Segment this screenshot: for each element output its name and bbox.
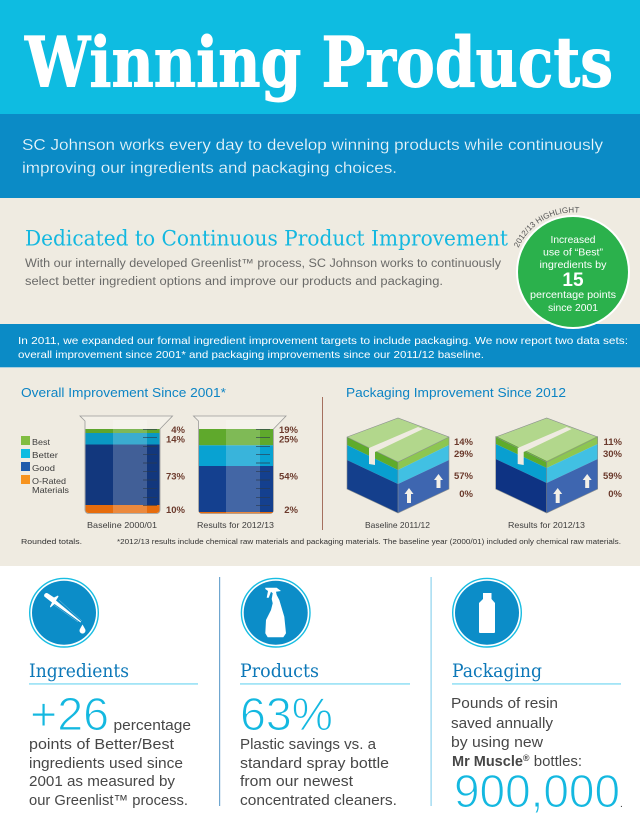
heading: Packaging (452, 660, 542, 682)
beaker chart: baseline 2000/01: 10% (166, 505, 186, 516)
legend: Better (32, 450, 58, 460)
panel: charts (0, 368, 640, 566)
description: concentrated cleaners. (240, 793, 397, 809)
callout: 2012/13 highlight (514, 206, 630, 329)
beaker chart: results 2012/13: 19% (279, 425, 299, 436)
note text: overall improvement since 2001* and packaging improvements since our 2011/12 baseline. (18, 349, 484, 361)
legend: Best (32, 437, 51, 447)
intro text: improving our ingredients and packaging choices. (22, 160, 397, 177)
chart heading: packaging: Packaging Improvement Since 2012 (346, 385, 566, 400)
blue note band (0, 324, 640, 368)
box chart: baseline 2011/12: 14% (454, 437, 474, 448)
heading: Dedicated to Continuous Product Improvement (25, 227, 508, 252)
stat: 900,000 (454, 765, 620, 817)
stat: +26 (30, 688, 109, 740)
box chart: results 2012/13: 11% (603, 437, 623, 448)
panel: ingredients (29, 578, 198, 809)
description: ingredients used since (29, 756, 183, 772)
description: from our newest (240, 774, 353, 790)
footnotes: *2012/13 results include chemical raw materials and packaging materials. The baseline year (2000/01) included only chemical raw materials. (117, 537, 621, 546)
box chart: results 2012/13 (496, 418, 623, 530)
box chart: baseline 2011/12 (347, 418, 474, 530)
intro band (0, 114, 640, 198)
heading: Ingredients (29, 660, 129, 682)
stat: 63% (240, 688, 333, 740)
callout text: ingredients by (540, 259, 607, 271)
box chart: results 2012/13: Results for 2012/13 (508, 520, 585, 530)
box chart: baseline 2011/12: 0% (459, 489, 474, 500)
beaker chart: baseline 2000/01: 73% (166, 472, 186, 482)
icon: bottle (453, 578, 521, 647)
description: With our internally developed Greenlist™ process, SC Johnson works to continuously (25, 258, 501, 270)
beaker chart: results 2012/13: Results for 2012/13 (197, 520, 274, 530)
description: bottles: (530, 753, 582, 770)
legend (21, 436, 69, 495)
legend: Materials (32, 485, 69, 495)
description: Plastic savings vs. a (240, 737, 377, 753)
box chart: results 2012/13: 0% (608, 489, 623, 500)
beaker chart: results 2012/13: 2% (284, 505, 299, 516)
beaker chart: baseline 2000/01: 4% (171, 425, 186, 436)
beaker chart: results 2012/13: 54% (279, 472, 299, 482)
description: our Greenlist™ process. (29, 793, 188, 809)
box chart: results 2012/13: 30% (603, 449, 623, 460)
beaker chart: results 2012/13: 25% (279, 434, 299, 446)
description: ® (523, 753, 530, 763)
panel: packaging (451, 578, 623, 817)
description: by using new (451, 735, 544, 751)
beaker chart: baseline 2000/01 (80, 416, 186, 530)
description: select better ingredient options and improve our products and packaging. (25, 276, 443, 288)
callout text: use of “Best” (543, 246, 604, 258)
callout text: 15 (562, 270, 584, 291)
box chart: baseline 2011/12: 57% (454, 471, 474, 482)
description: Pounds of resin (451, 696, 558, 712)
chart heading: overall: Overall Improvement Since 2001* (21, 385, 226, 400)
note text: In 2011, we expanded our formal ingredient improvement targets to include packaging. We now report two data sets: (18, 335, 628, 347)
description: standard spray bottle (240, 756, 389, 772)
description: saved annually (451, 716, 554, 732)
beaker chart: results 2012/13 (194, 416, 299, 530)
description: percentage (114, 718, 191, 734)
panel: continuous improvement (0, 198, 640, 324)
box chart: baseline 2011/12: Baseline 2011/12 (365, 520, 430, 530)
callout text: since 2001 (548, 302, 598, 314)
curved label: 2012/13 HIGHLIGHT (514, 206, 580, 248)
panel: products (240, 578, 410, 809)
footnotes: Rounded totals. (21, 537, 82, 546)
legend: O-Rated (32, 476, 66, 486)
description: points of Better/Best (29, 737, 174, 753)
heading: Products (240, 660, 319, 682)
description: Mr Muscle (452, 754, 523, 770)
callout text: percentage points (530, 289, 616, 301)
icon: spray bottle (241, 578, 310, 647)
legend: Good (32, 463, 55, 473)
icon: dropper (30, 578, 98, 647)
box chart: results 2012/13: 59% (603, 471, 623, 482)
description: 2001 as measured by (29, 774, 176, 790)
box chart: baseline 2011/12: 29% (454, 449, 474, 460)
beaker chart: baseline 2000/01: Baseline 2000/01 (87, 520, 157, 530)
header banner (0, 0, 640, 114)
panel: packaging: . (620, 799, 623, 810)
intro text: SC Johnson works every day to develop winning products while continuously (22, 137, 603, 154)
beaker chart: baseline 2000/01: 14% (166, 434, 186, 446)
callout text: Increased (550, 234, 596, 246)
